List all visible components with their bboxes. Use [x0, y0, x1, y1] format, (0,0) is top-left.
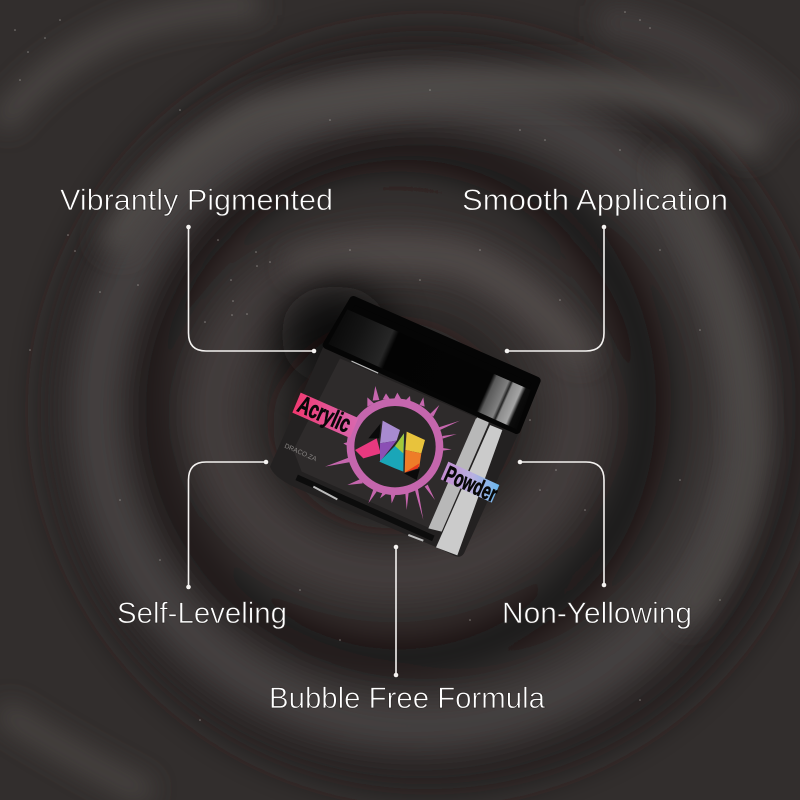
jar body	[270, 347, 518, 557]
product jar	[270, 300, 537, 557]
callout: Smooth Application: Smooth Application	[462, 184, 728, 217]
jar small print: DRACO.ZA	[283, 443, 318, 463]
jar reflections	[313, 361, 488, 541]
callout: Bubble Free Formula	[269, 545, 545, 715]
label: ring centre	[354, 406, 436, 487]
background: glitter specks	[14, 11, 721, 721]
label band: Acrylic: Acrylic	[294, 391, 355, 439]
callout: Vibrantly Pigmented	[60, 184, 333, 353]
callout: Self-Leveling: Self-Leveling	[117, 597, 287, 630]
jar powder window	[293, 358, 478, 528]
silver strips	[428, 418, 502, 555]
label: pink splash ring	[325, 386, 460, 520]
logo: coloured triangles	[355, 421, 425, 480]
label band: Powder	[441, 461, 501, 507]
jar lid	[327, 300, 537, 430]
callout: Non-Yellowing	[502, 460, 692, 630]
label band: Acrylic	[292, 391, 358, 439]
callout: Self-Leveling	[117, 460, 287, 630]
jar base glass	[297, 477, 433, 538]
callout: Smooth Application	[462, 184, 728, 353]
callout: Vibrantly Pigmented: Vibrantly Pigmented	[60, 184, 333, 217]
callout: Bubble Free Formula: Bubble Free Formula	[269, 682, 545, 715]
label band: Powder: Powder	[441, 461, 501, 507]
callout: Non-Yellowing: Non-Yellowing	[502, 597, 692, 630]
